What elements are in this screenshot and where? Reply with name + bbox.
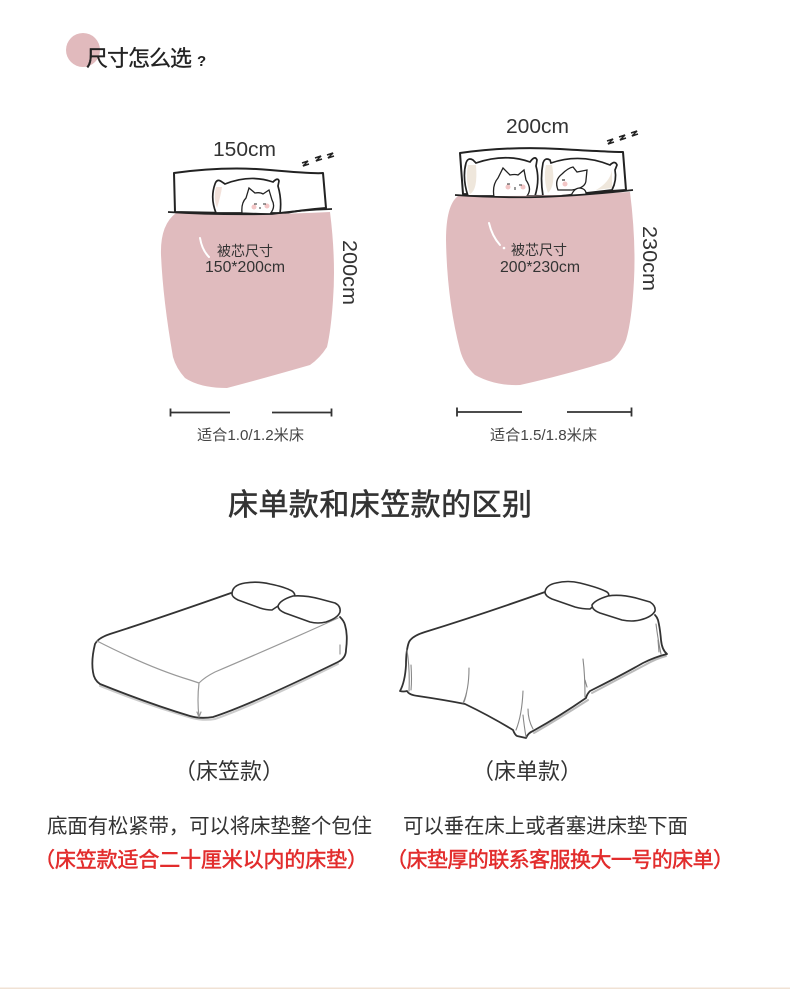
label: width 150cm: 150cm [213,139,276,161]
width measure bars [457,408,632,416]
illustration: fitted sheet bed [92,582,347,720]
bottom band [0,988,790,989]
heading text: 尺寸怎么选 [86,46,192,71]
right pillow [542,158,617,196]
icon: sleeping zzz [302,153,334,166]
cat face [242,188,274,214]
icon: pink circle [66,33,100,67]
right pillow shading [545,165,612,193]
sheet outline [400,592,667,738]
label: length 200cm: 200cm [338,240,360,305]
quilt shape [161,212,334,388]
quilt label: 150*200cm [205,259,285,276]
mattress outline [92,593,347,718]
headboard [460,148,626,196]
base line of the headboard [455,190,633,197]
diagram: double quilt 200x230 [446,116,660,444]
quilt label [500,242,580,276]
description: fitted sheet: 底面有松紧带，可以将床垫整个包住 [47,815,372,838]
base line of the headboard [168,209,332,214]
width measure bars [170,408,332,416]
icon: sleeping zzz [607,131,638,144]
caption: fitted sheet: （床笠款） [174,759,284,784]
quilt label [205,243,285,276]
section heading: size selection [66,33,206,71]
description: flat sheet: 可以垂在床上或者塞进床垫下面 [403,815,688,838]
front pillow [278,596,340,623]
elastic seams [97,618,340,717]
quilt label: 200*230cm [500,259,580,276]
main heading: 床单款和床笠款的区别 [228,489,532,522]
sheet folds [407,624,661,737]
left pillow [464,158,538,196]
front pillow [592,595,655,621]
left pillow shading [467,165,476,194]
illustration: flat sheet bed [400,582,667,738]
shadow [534,656,666,733]
quilt highlight [489,223,500,245]
headboard [174,169,326,214]
quilt shape [446,192,634,385]
quilt label: 被芯尺寸 [511,242,567,258]
heading question mark: ? [197,53,206,70]
quilt label: 被芯尺寸 [217,243,273,259]
label: width 200cm: 200cm [506,116,569,138]
note: fitted sheet thickness: （床笠款适合二十厘米以内的床垫） [34,849,368,872]
label: length 230cm: 230cm [638,226,660,291]
back pillow [545,582,609,609]
note: flat sheet thickness: （床垫厚的联系客服换大一号的床单） [386,849,734,872]
caption: flat sheet: （床单款） [472,759,582,784]
fit label: 适合1.0/1.2米床 [197,427,304,444]
shadow [100,664,338,720]
back pillow [232,582,295,610]
pillow [213,178,281,213]
left cat face [494,168,530,197]
fit label: 适合1.5/1.8米床 [490,427,597,444]
right cat face [557,167,587,196]
quilt highlight [200,238,209,257]
pillow shading [215,187,222,208]
quilt highlight dot [503,247,505,249]
diagram: single quilt 150x200 [161,139,360,444]
